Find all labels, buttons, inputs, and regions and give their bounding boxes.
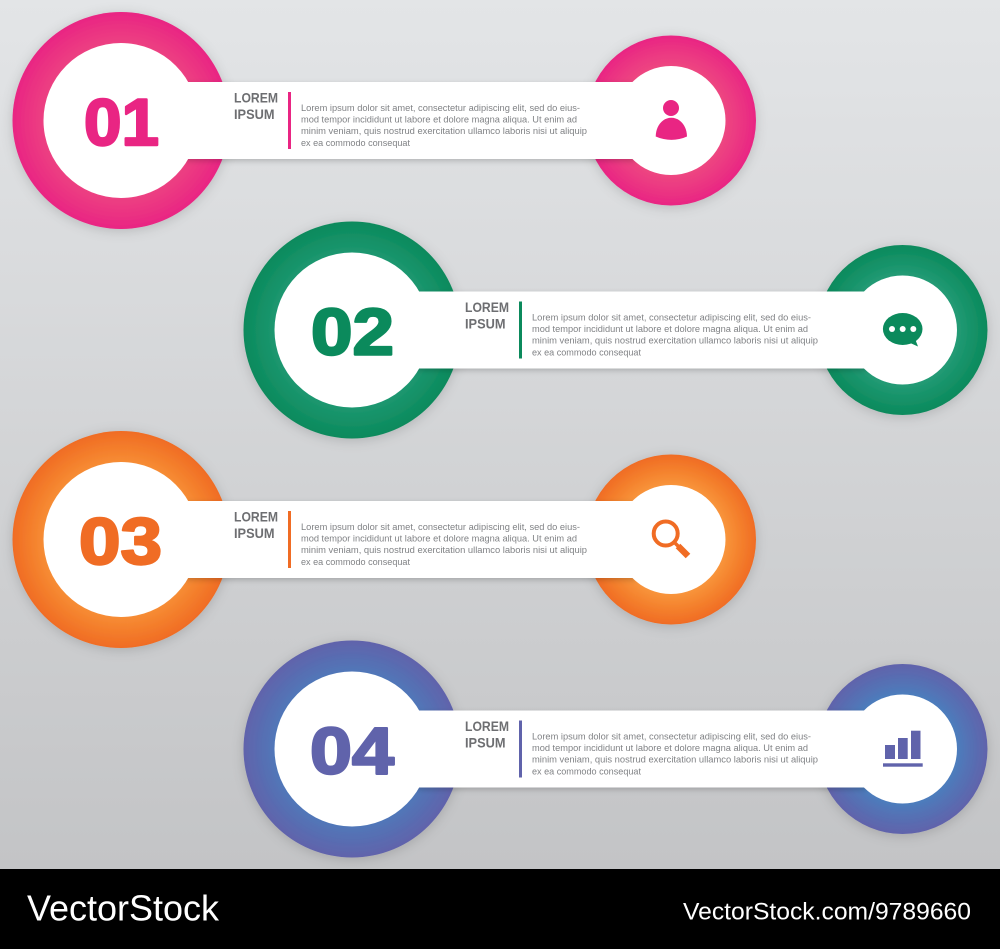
icon: bar chart	[883, 731, 923, 767]
panel: step 02	[244, 222, 988, 438]
big ring 03	[12, 431, 230, 648]
panel: step 01	[12, 12, 756, 229]
small ring 03	[586, 454, 756, 624]
body text 02: mod tempor incididunt ut labore et dolore magna aliqua. Ut enim ad	[532, 324, 808, 334]
body text 01: ex ea commodo consequat	[301, 138, 411, 148]
body text 01: Lorem ipsum dolor sit amet, consectetur adipiscing elit, sed do eius-	[301, 103, 580, 113]
white bar 04	[417, 710, 867, 788]
body text 02: Lorem ipsum dolor sit amet, consectetur adipiscing elit, sed do eius-	[532, 312, 811, 322]
heading 04	[465, 718, 509, 750]
heading 04: IPSUM	[465, 734, 506, 750]
panel: step 04	[244, 640, 988, 858]
body text 02: minim veniam, quis nostrud exercitation ullamco laboris nisi ut aliquip	[532, 336, 818, 346]
number 04: 04	[310, 714, 394, 788]
big ring 02	[244, 222, 460, 438]
body text 01: mod tempor incididunt ut labore et dolore magna aliqua. Ut enim ad	[301, 115, 577, 125]
inner circle left 03	[44, 462, 198, 617]
icon: person	[656, 100, 687, 140]
small ring 02	[818, 245, 988, 415]
body text 03	[301, 522, 587, 567]
heading 01: LOREM	[234, 90, 278, 106]
inner circle right 02	[848, 276, 957, 384]
inner circle right 04	[848, 694, 957, 804]
heading 02: IPSUM	[465, 316, 506, 332]
white bar 01	[186, 82, 636, 159]
body text 02: ex ea commodo consequat	[532, 347, 642, 357]
accent line 02	[519, 302, 522, 358]
body text 04: minim veniam, quis nostrud exercitation ullamco laboris nisi ut aliquip	[532, 755, 818, 765]
inner circle left 01	[44, 43, 198, 198]
footer logo: VectorStock	[27, 888, 220, 928]
body text 03: Lorem ipsum dolor sit amet, consectetur adipiscing elit, sed do eius-	[301, 522, 580, 532]
body text 03: ex ea commodo consequat	[301, 557, 411, 567]
accent line 01	[288, 92, 291, 149]
body text 04: mod tempor incididunt ut labore et dolore magna aliqua. Ut enim ad	[532, 743, 808, 753]
small ring 01	[586, 36, 756, 206]
heading 03: LOREM	[234, 508, 278, 524]
heading 04: LOREM	[465, 718, 509, 734]
body text 03: minim veniam, quis nostrud exercitation ullamco laboris nisi ut aliquip	[301, 545, 587, 555]
body text 01: minim veniam, quis nostrud exercitation ullamco laboris nisi ut aliquip	[301, 126, 587, 136]
big ring 01	[12, 12, 230, 229]
big ring 04	[244, 640, 460, 858]
footer url: VectorStock.com/9789660	[683, 898, 971, 926]
heading 01: IPSUM	[234, 106, 274, 122]
inner circle left 04	[274, 672, 430, 826]
icon: magnifier	[654, 522, 688, 556]
accent line 03	[288, 511, 291, 568]
accent line 04	[519, 720, 522, 778]
body text 04	[532, 732, 818, 776]
heading 03	[234, 508, 278, 541]
heading 02	[465, 299, 509, 332]
footer bar	[0, 869, 1000, 949]
number 01: 01	[84, 85, 159, 159]
body text 02	[532, 312, 818, 357]
panel: step 03	[12, 431, 756, 648]
number 03: 03	[79, 504, 162, 578]
small ring 04	[818, 664, 988, 834]
icon: speech bubble	[883, 313, 922, 346]
heading 01	[234, 90, 278, 122]
inner circle right 01	[616, 66, 726, 175]
body text 01	[301, 103, 587, 148]
body text 04: Lorem ipsum dolor sit amet, consectetur adipiscing elit, sed do eius-	[532, 732, 811, 742]
number 02: 02	[311, 294, 394, 368]
inner circle right 03	[616, 485, 726, 594]
heading 03: IPSUM	[234, 525, 274, 541]
heading 02: LOREM	[465, 299, 509, 315]
white bar 02	[417, 292, 867, 368]
body text 04: ex ea commodo consequat	[532, 766, 642, 776]
body text 03: mod tempor incididunt ut labore et dolore magna aliqua. Ut enim ad	[301, 534, 577, 544]
inner circle left 02	[274, 252, 430, 408]
white bar 03	[186, 501, 636, 578]
